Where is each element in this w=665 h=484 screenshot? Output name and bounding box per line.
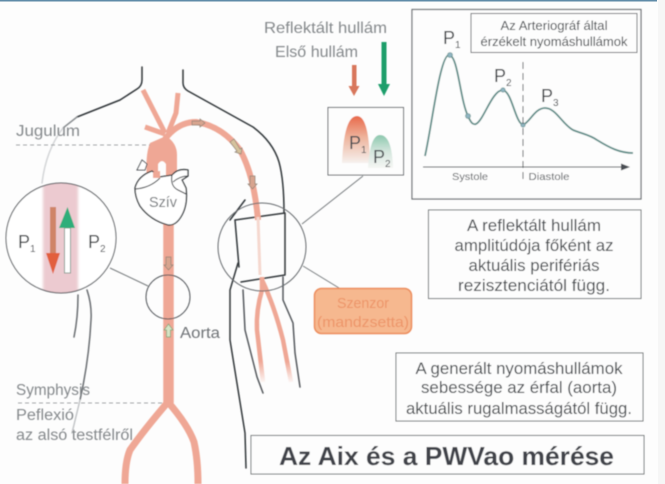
text box: reflected wave: rezisztenciától függ. (458, 277, 610, 295)
arrow: P2 green (59, 207, 75, 273)
arrow: arm (248, 176, 257, 189)
label: Aorta: Aorta (180, 325, 220, 342)
label: P1: 1 (30, 244, 36, 255)
label: reflexion: az alsó testfélről (16, 427, 133, 444)
text box: reflected wave: A reflektált hullám (467, 217, 601, 235)
peak labels: 1 (455, 40, 461, 51)
label: P2: 2 (100, 244, 106, 255)
small flow arrows (164, 119, 257, 337)
label: P1: P (18, 232, 30, 252)
panel: wave composition: 1 (361, 145, 367, 156)
peak markers (448, 52, 525, 127)
text box: reflected wave: amplitúdója főként az (454, 237, 614, 255)
body outline (42, 67, 300, 468)
label: sensor cuff (314, 288, 412, 334)
connectors (110, 176, 363, 288)
text box: reflected wave: aktuális perifériás (468, 257, 600, 275)
label: Szív: Szív (149, 194, 177, 211)
circle: aorta measuring point (146, 275, 190, 319)
aortic root (146, 136, 177, 180)
label: reflexion (16, 407, 133, 444)
panel: pressure curve chart (412, 10, 641, 199)
arrow: arch 2 (230, 139, 242, 154)
panel: wave composition: P (349, 133, 361, 153)
label: Jugulum: Jugulum (16, 123, 80, 140)
icon: heart (135, 160, 188, 225)
chart caption box: Az Arteriográf által (500, 19, 608, 33)
arrow: aorta down (164, 257, 173, 270)
chart caption box (471, 14, 637, 52)
title (251, 436, 644, 474)
arteries (125, 90, 291, 484)
title: Az Aix és a PWVao mérése (279, 441, 614, 471)
label: Jugulum (16, 123, 150, 145)
label: P2: P (88, 232, 100, 252)
panel: pressure curve chart: Diastole (528, 171, 570, 183)
text box: wave velocity: sebessége az érfal (aorta) (421, 379, 617, 397)
text box: wave velocity (396, 353, 643, 421)
panel: wave composition: 2 (385, 159, 391, 170)
arrow: red wave (348, 65, 360, 96)
label: sensor cuff: (mandzsetta) (317, 315, 409, 331)
peak labels: P (443, 28, 455, 48)
text box: wave velocity: A generált nyomáshullámok (416, 360, 623, 378)
divider (522, 62, 524, 183)
panel: pressure curve chart: P (541, 86, 553, 106)
panel: wave composition (328, 108, 404, 175)
label: Symphysis: Symphysis (16, 382, 90, 399)
panel: wave composition: P (373, 147, 385, 167)
legend: reflected and first wave: Első hullám (275, 44, 358, 61)
panel: pressure curve chart: 2 (506, 78, 512, 89)
lens: pressure waves in aorta (6, 178, 116, 298)
arrow: aorta up (164, 324, 173, 337)
panel: pressure curve chart: 3 (553, 98, 559, 109)
arrow: P1 red (46, 207, 60, 274)
time axis (423, 166, 624, 168)
panel: pressure curve chart: P (494, 66, 506, 86)
arch and arm artery (165, 122, 258, 220)
chart caption box: érzékelt nyomáshullámok (480, 35, 628, 49)
arrow: green wave (378, 42, 390, 96)
label: reflexion: Peflexió (16, 407, 74, 424)
aorta (163, 222, 174, 403)
circle: cuff area (218, 203, 306, 291)
curve (425, 55, 633, 156)
label: sensor cuff: Szenzor (337, 296, 389, 312)
text box: reflected wave (428, 210, 641, 298)
panel: pressure curve chart: Systole (452, 171, 488, 183)
arrow: arch 1 (192, 119, 205, 127)
carotid branches (143, 90, 165, 133)
legend: reflected and first wave (264, 20, 387, 61)
legend: reflected and first wave: Reflektált hullám (264, 20, 387, 37)
text box: wave velocity: aktuális rugalmasságától függ. (406, 400, 632, 418)
